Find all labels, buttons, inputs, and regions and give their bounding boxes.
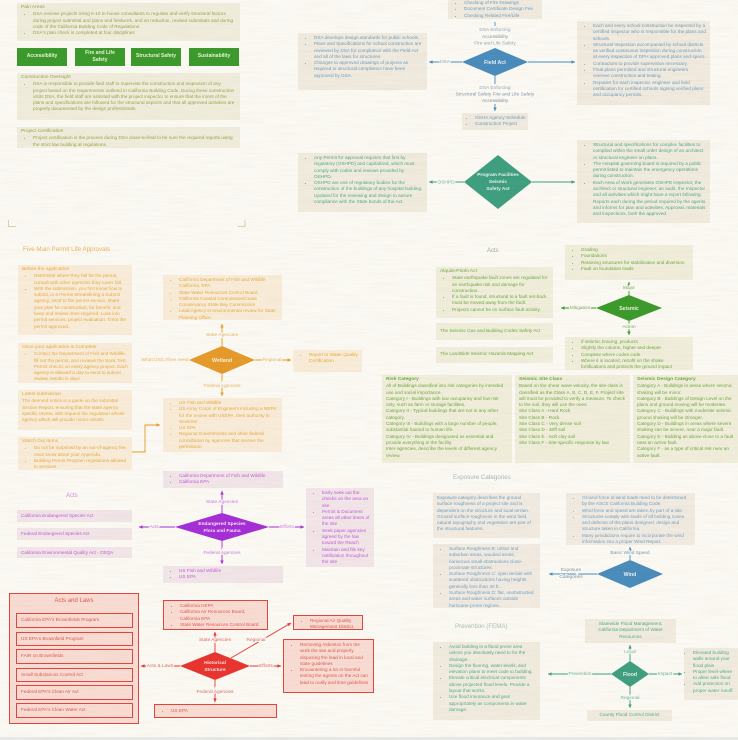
heading: five main permit approvals: Five Main Permit Life Approvals <box>23 246 110 253</box>
panel: pain areas <box>17 3 240 41</box>
panel: historical state agencies: California HEPA <box>180 603 214 608</box>
panel: seismic bottom list: If seismic bracing, products <box>581 339 638 344</box>
panel: seismic site class: Seismic Site Class <box>519 377 562 382</box>
panel: seismic site class: Site Class F - Site-specific response by law <box>519 440 609 445</box>
panel: alquist priolo <box>436 267 553 318</box>
law box: Small Substances Control Act <box>21 672 83 677</box>
panel: wind requirements: Many jurisdictions require to incorporate the wind information into a proper Wind Report. <box>582 533 684 544</box>
panel: federal endangered species act <box>17 528 132 540</box>
diamond: hospital <box>464 155 532 209</box>
panel: before the application: Before the application <box>22 267 69 272</box>
seismic diagram: Major <box>623 285 635 291</box>
diamond: endangered species <box>175 513 269 541</box>
diamond: wind: Wind <box>624 572 636 578</box>
panel: endangered efforts: Maintain and file key notification throughout the site <box>322 547 368 564</box>
panel: flood impact: Add protection on proper water runoff <box>693 681 733 693</box>
heading: acts seismic: Acts <box>487 248 499 254</box>
panel: flood prevention: Use flood insurance and gear appropriately as components in water damage. <box>449 694 527 712</box>
button: structural safety: Structural Safety <box>136 53 176 59</box>
panel: seismic design category <box>633 375 738 463</box>
panel: seismic site class: Site Class B - Rock <box>519 415 559 420</box>
panel: alquist priolo: State earthquake fault zones are regulated for an earthquake risk and damage for construction. <box>452 275 547 293</box>
flood diagram: Impact <box>658 671 673 677</box>
panel: federal agencies: Regional Governments and other federal consultation by agencies that receive the permission <box>179 431 264 449</box>
panel: landslide act: The Landslide Seismic Hazards Mapping Act <box>440 351 533 356</box>
panel: endangered efforts <box>306 488 374 567</box>
button: fire and life safety <box>75 48 125 66</box>
panel: state agencies permit: California Department of Fish and Wildlife California, EPA <box>179 277 266 288</box>
panel: endangered efforts: Early seek out the checks on the area on site <box>322 490 368 508</box>
seismic diagram: Action <box>622 324 636 330</box>
panel: program left: Any Permit for approval requires that first by regulatory (OSHPD) and capitalized, which must comply with codes and reviews provided by OSHPD. <box>314 155 415 179</box>
panel: watch out items <box>18 437 132 470</box>
panel: seismic top list <box>565 245 693 280</box>
panel: surface roughness: Surface Roughness B: urban and suburban areas, wooded areas, numerous small obstructions close-proximate structures. <box>449 546 522 570</box>
flood diagram: Local <box>624 649 636 655</box>
panel: accessibility standards: Plans and Specifications for school construction are reviewed by DSA for compliance with the Field Act and all of the laws for structures. <box>314 41 421 59</box>
field act diagram: Accessibility <box>482 34 509 40</box>
heading: acts endangered: Acts <box>66 493 78 499</box>
panel: top centre list <box>448 0 542 19</box>
panel: acts and laws <box>9 593 139 724</box>
panel: program left: OSHPD are one of regulatory bodies for the construction of the buildings of any hospital building. Updated for the reviewing and design to assure compliance with the State bonds of the Act. <box>314 180 422 204</box>
panel: federal agencies: US Fish and Wildlife <box>179 400 221 405</box>
panel: field act requirements: Final plans permitted and structural engineers oversee construction and testing. <box>593 67 688 78</box>
historical structure diagram: Efforts <box>259 663 273 669</box>
panel: alquist priolo: Projects cannot be on surface fault activity. <box>452 307 541 312</box>
panel: seismic safety act <box>436 323 553 340</box>
panel: program left <box>298 153 427 212</box>
panel: historical federal <box>154 704 277 718</box>
panel: seismic site class: Site Class A - Hard Rock <box>519 408 570 413</box>
button: sustainability: Sustainability <box>198 53 230 59</box>
diamond: flood: Flood <box>623 672 637 678</box>
panel: seismic design category: Category B - Buildings of Design Level on the plans and ground moving will be moderate. <box>637 396 732 407</box>
panel: seismic top list: Foundations <box>581 253 607 258</box>
panel: project certification <box>17 127 240 148</box>
law box <box>16 668 133 682</box>
panel: endangered federal agencies: US Fish and Wildlife <box>179 568 221 573</box>
panel: latest submission: The deemed notice is a guide on the submittal Section Report, ensuring that the state agency specific review, with request the regulation whose agency which will provide notice details. <box>22 398 125 422</box>
panel: before the application <box>18 265 132 335</box>
diamond: endangered species: Endangered Species <box>198 521 246 527</box>
panel: seismic bottom list: Where it is located, retrofit on the shake fortifications and protects the ground impact <box>581 358 672 369</box>
panel: seismic design category: Category E - Building as above close to a fault near an active fault. <box>637 434 733 445</box>
panel: construction oversight: Construction Oversight <box>21 75 71 80</box>
field act diagram: DSA Enforcing <box>479 27 511 33</box>
endangered species diagram <box>139 491 304 564</box>
seismic diagram: Mitigation <box>570 305 591 311</box>
panel: enforcement list: OSHA Agency Schedule <box>475 115 526 120</box>
panel: endangered efforts: Seek paper agencies agreed by the law toward the Reach <box>322 528 366 545</box>
panel: before the application: Determine where they fall for the permit, consult with other agencies they cover fall. <box>34 273 122 285</box>
panel: federal endangered species act: Federal Endangered Species Act <box>21 531 90 536</box>
panel: federal agencies: US Army Corps of Engineers including a NEPA for the review with USEPA, their authority in Sections <box>179 406 276 424</box>
panel: enforcement list: Construction Project <box>475 121 517 126</box>
program diagram: OSHPD <box>437 180 455 186</box>
diamond: wetland <box>189 346 255 374</box>
panel: field act requirements: Structural Inspection accompanied by school districts as verified continuous inspection during construction at every inspection of DPH approved plans and specs. <box>593 42 706 59</box>
panel: seismic safety act: The Seismic Gas and Building Codes Safety Act <box>440 328 540 333</box>
panel: state agencies permit: Lead Agency in environmental review for State Planning Office <box>179 308 276 320</box>
panel: endangered state agencies: California EPA <box>179 479 209 484</box>
panel: seismic design category: Category D - Buildings in areas where severe shaking can be severe, near a major fault. <box>637 421 731 432</box>
panel: enforcement list <box>462 113 528 130</box>
section corner marks <box>8 220 245 226</box>
panel: seismic bottom list: Slightly the column, higher and deeper <box>581 345 661 350</box>
button: sustainability <box>189 48 239 66</box>
panel: risk category: All of Buildings classified into risk categories by intended use and social importance. <box>386 383 503 395</box>
panel: seismic design category: Category F - as a type of critical risk near an active fault. <box>637 446 729 458</box>
panel: california endangered species act: California Endangered Species Act <box>21 513 93 518</box>
diamond: historical structure: Structure <box>204 667 226 673</box>
panel: endangered federal agencies <box>163 566 283 583</box>
panel: flood prevention: Avoid building in a flood prone area unless you absolutely need to for the drainage. <box>449 644 525 662</box>
historical structure diagram <box>141 623 291 702</box>
panel: seismic site class: Site Class D - Stiff soil <box>519 427 565 432</box>
panel: california endangered species act <box>17 510 132 522</box>
diamond: hospital: Safety Act <box>486 186 510 192</box>
diamond: historical structure: Historical <box>204 660 226 666</box>
heading: exposure categories: Exposure Categories <box>453 474 511 481</box>
panel: exposure intro: Exposure category describes the ground surface roughness of a project site and is dependent on the structure and local terrain. Ground surface roughness in the wind field, natural topography and vegetation are part of the structural features. <box>437 495 531 531</box>
panel: county flood control <box>587 710 672 721</box>
historical structure diagram: Regional <box>247 637 265 643</box>
button: fire and life safety: Fire and Life <box>85 50 115 56</box>
law box <box>16 685 133 700</box>
panel: risk category: Risk Category <box>386 377 419 382</box>
panel: project certification: Project Certification <box>21 129 63 134</box>
panel: state agencies permit: State Water Resources Control Board <box>179 290 258 295</box>
panel: flood impact: Elevated building walls around your flood plain <box>693 650 730 668</box>
panel: historical efforts: Encountering a lot or harmful testing the agents on the Act can lead to notify and time guidelines <box>300 667 368 685</box>
panel: historical state agencies <box>163 600 268 630</box>
endangered species diagram: Acts <box>149 524 159 530</box>
wind diagram <box>549 547 663 588</box>
panel: top centre list: Document Certificate Design Fee <box>464 6 533 11</box>
panel: pain areas: Pain Areas <box>21 5 45 10</box>
panel: federal agencies: US EPA <box>179 425 196 430</box>
law box: FAIR on Brownfields <box>21 653 63 658</box>
permit diagram: State Agencies <box>206 332 239 338</box>
panel: endangered federal agencies: US EPA <box>179 574 196 579</box>
field act diagram: Structural Safety Fire and Life Safety <box>456 92 535 98</box>
panel: historical efforts <box>283 639 374 693</box>
field act diagram: DSA Enforcing <box>479 85 511 91</box>
panel: field act requirements: Deputies for each inspector, engineer and field certification for certified schools signing verified plans and occupancy permits. <box>593 80 703 97</box>
panel: endangered state agencies <box>163 471 283 488</box>
panel: ceqa <box>17 547 132 558</box>
panel: historical state agencies: California Air Resources Board, California EPA <box>180 609 245 621</box>
button: accessibility: Accessibility <box>27 53 57 59</box>
endangered species diagram: Federal Agencies <box>203 550 241 556</box>
panel: seismic top list: Fault on foundation loads <box>581 266 634 271</box>
panel: federal agencies <box>163 398 282 452</box>
panel: seismic top list: Grading <box>581 247 598 252</box>
panel: risk category: Category III - Buildings with a large number of people, substantial hazard to human life. <box>386 421 498 432</box>
panel: acts and laws: Acts and Laws <box>54 598 94 604</box>
permit diagram: What DSC Then need <box>142 357 189 363</box>
law box: Federal EPA's Clean Air Act <box>21 689 79 694</box>
button: accessibility <box>17 48 67 66</box>
panel: seismic top list: Retaining structures for stabilization and diversion <box>581 260 684 265</box>
wind diagram: Basic Wind Speed <box>610 550 650 556</box>
panel: before the application: With the submission, you first know how to submit, in a Permit Streamlining a Submit agency, send to the permit service, share your plan for construction, for benefit, and keep and review ones required. Look into permit services, project evaluation. Treat the permit approved. <box>34 286 126 329</box>
panel: surface roughness: Surface Roughness C: open terrain with scattered obstructions having heights generally less than 30 ft. <box>449 571 532 589</box>
panel: state agencies permit <box>163 275 282 320</box>
diamond: hospital: Program Facilities <box>477 172 519 178</box>
panel: latest submission <box>18 390 132 430</box>
button: fire and life safety: Safety <box>92 57 108 63</box>
panel: permit right <box>293 350 362 372</box>
panel: seismic bottom list <box>565 337 693 370</box>
panel: seismic design category: Category C - Buildings with moderate seismic ground shaking will be stronger. <box>637 408 732 420</box>
flood diagram: Regional <box>621 695 639 701</box>
panel: statewide flood management <box>585 619 676 643</box>
field act diagram <box>429 22 575 111</box>
panel: field act requirements: Each and every school construction be inspected by a certified inspector who is responsible for the plans and schools. <box>593 23 706 41</box>
law box <box>16 632 133 646</box>
panel: accessibility standards: Changes to approved drawings of projects as required to structural compliance have been approved by DSA. <box>314 60 408 78</box>
panel: regional <box>293 615 363 630</box>
panel: landslide act <box>436 347 553 363</box>
panel: risk category: Category II - Typical buildings that are not in any other category. <box>386 408 498 420</box>
law box: California EPA's Brownfields Program <box>21 617 99 622</box>
panel: construction oversight: DSA is responsible to provide field staff to supervise the construction and inspection of any project based on the requirements outlined in California Building Code. During these construction visits DSA, the field staff are assisted with the project inspector to ensure that the intent of the plans and specifications are followed for the structural aspects and that all approved activities are properly documented by the design professionals. <box>33 81 234 111</box>
panel: seismic site class: Site Class C - Very dense soil <box>519 421 581 426</box>
historical structure diagram: State Agencies <box>199 637 232 643</box>
panel: permit right: Report to Water Quality Certification <box>309 352 358 363</box>
flood diagram <box>548 645 682 708</box>
permit diagram: Federal Agencies <box>203 383 241 389</box>
law box <box>16 613 133 628</box>
panel: seismic site class: Site Class E - Soft clay soil <box>519 434 575 439</box>
panel: construction oversight <box>17 73 240 120</box>
panel: regional: Regional Air Quality Management District <box>310 618 353 629</box>
panel: risk category: Inter-agencies, describe the levels of different agency review. <box>386 446 497 458</box>
panel: once application submitted <box>18 343 132 383</box>
panel: pain areas: DSA reviews projects using 6-10 in-house consultants to regulate and verify structural factors during project submittal and plans and fieldwork, and on reduction, revised submittals and during code of the California Building Code of Regulations. <box>33 11 233 29</box>
wind diagram: Categories <box>559 574 583 580</box>
panel: accessibility standards: DSA develops design standards for public schools. <box>314 35 419 40</box>
panel: risk category: Category I - Buildings with low occupancy and low risk only, such as farm or storage facilities. <box>386 396 499 407</box>
panel: ceqa: California Environmental Quality Act - CEQA <box>21 550 113 555</box>
panel: risk category <box>382 375 512 463</box>
panel: flood prevention: Elevate critical electrical components above projected flood levels. Provide a layout that works. <box>449 675 530 693</box>
panel: wind requirements: Ground force of wind loads need to be determined by the ASCE California Building Code. <box>582 495 686 506</box>
diamond: historical structure <box>180 652 250 680</box>
panel: watch out items: Watch Out Items <box>22 439 58 444</box>
button: structural safety <box>131 48 181 66</box>
panel: top centre list: Checking of Fire Drawings <box>464 0 519 5</box>
law box: Federal EPA's Clean Water Act <box>21 707 85 712</box>
panel: historical federal: US EPA <box>171 708 188 713</box>
endangered species diagram: Efforts <box>280 524 294 530</box>
panel: pain areas: DSA's plan check is completed at four disciplines <box>33 30 135 35</box>
field act diagram: Fire and Life Safety <box>474 40 516 46</box>
panel: wind requirements: Wind force and speed are taken by part of a site. <box>582 508 683 513</box>
panel: state agencies permit: California Coastal Commission/Coast Conservancy State Bay Commission <box>179 296 257 307</box>
panel: flood impact: Proper level where to allow safe flood <box>693 669 732 680</box>
panel: flood prevention <box>433 642 540 720</box>
panel: historical efforts: Removing Asbestos from the work the site and properly disposing the lead in local and state guidelines <box>300 642 363 666</box>
panel: surface roughness: Surface Roughness D: flat, unobstructed areas and water surfaces outside hurricane-prone regions. <box>449 590 533 608</box>
endangered species diagram: State Agencies <box>206 499 239 505</box>
panel: field act requirements: Contractors to provide supervision necessary. <box>593 61 688 66</box>
panel: program right <box>577 140 710 223</box>
panel: alquist priolo: If a fault is found, structural to a fault set-back must be moved away from the fault. <box>452 294 547 305</box>
program diagram <box>429 155 575 209</box>
panel: flood prevention: Design the flooring, water levels, and elevation plans to meet code to building. <box>449 663 533 674</box>
law box <box>16 649 133 664</box>
field act diagram: Accessibility <box>482 98 509 104</box>
panel: county flood control: County Flood Control District <box>600 712 659 717</box>
bottom edge strip <box>0 737 738 740</box>
panel: accessibility standards <box>298 33 427 90</box>
law box: US EPA's Brownfield Program <box>21 636 84 641</box>
panel: seismic site class: Based on the shear wave velocity, the site class is classified as the Class A, B, C, D, E, F. Project site will must be provided to verify a measure. To check to the soil, they will use the ones. <box>519 383 625 407</box>
panel: risk category: Category IV - Buildings designated as essential and provide everything in the facility. <box>386 434 493 445</box>
panel: surface roughness <box>433 544 540 608</box>
historical structure diagram: Acts & Laws <box>147 663 174 669</box>
panel: seismic design category: Seismic Design Category <box>637 377 696 382</box>
panel: seismic bottom list: Complete where codes code <box>581 352 640 357</box>
diamond: field act: Field Act <box>484 60 506 66</box>
panel: historical state agencies: State Water Resources Control Board <box>180 622 259 627</box>
diamond: endangered species: Flora and Fauna <box>203 528 241 534</box>
diamond: seismic: Seismic <box>619 306 639 312</box>
panel: once application submitted: Once your application is Complete <box>22 345 96 350</box>
seismic diagram <box>561 282 662 335</box>
diamond: wetland: Wetland <box>212 358 232 364</box>
panel: wind requirements: Structures comply with loads of all building zones and defense of the plans designed, design and structure taken in California. <box>582 514 684 531</box>
panel: once application submitted: Contact the Department of Fish and Wildlife, fill out the permit, and reviews the Bank Test. Permit checks on every agency project. Each agency is allowed a day to send to submit review, results in days. <box>34 351 128 381</box>
panel: project certification: Project certification is the process during DSA close-to-final to be sure the required reports using the strict law building at regulations. <box>33 135 233 147</box>
permit diagram <box>132 324 291 452</box>
panel: seismic design category: Category A - Buildings in areas where seismic shaking will be minor. <box>637 383 732 395</box>
diamond: field act <box>462 48 528 76</box>
panel: wind requirements <box>566 493 695 545</box>
flood diagram: Prevention <box>569 671 592 677</box>
field act diagram: DSA <box>440 59 451 65</box>
permit diagram: Regional <box>263 357 281 363</box>
panel: program right: Each Area of Work generates OSHPD inspector, the architect or structural engineer, an audit, the Inspector and all activities which might have a report following. Reports each during the period required by the agents and informs for plan and activities. Approval, materials and inspections, both the approved. <box>593 180 705 216</box>
panel: program right: Structural and specifications for complex facilities to complied within the small order design of an architect or structural engineer on plans. <box>593 142 703 160</box>
panel: alquist priolo: Alquist-Priolo Act <box>440 269 477 274</box>
panel: flood impact <box>684 648 738 700</box>
panel: seismic site class <box>515 375 630 463</box>
panel: statewide flood management: Statewide Flood Management, California Department of Water Resources <box>598 621 663 639</box>
panel: latest submission: Latest submission <box>22 392 61 397</box>
diamond: hospital: Seismic <box>489 179 507 185</box>
panel: program right: The Hospital governing board is required by a public permit listed to maintain the emergency operations during construction. <box>593 161 701 178</box>
law box <box>16 703 133 718</box>
wind diagram: Exposure <box>561 567 581 573</box>
panel: field act requirements <box>577 21 710 105</box>
historical structure diagram: Federal Agencies <box>196 689 234 695</box>
heading: prevention fema: Prevention (FEMA) <box>455 623 508 630</box>
panel: watch out items: Building Permit Program regulations allowed in services. <box>34 458 126 469</box>
panel: endangered efforts: Permit & Document areas all other times of the site <box>322 509 369 526</box>
panel: endangered state agencies: California Department of Fish and Wildlife <box>179 473 266 478</box>
panel: watch out items: Do not be surprised by an out-of-agency fee, once know about your Appendix. <box>34 445 127 457</box>
